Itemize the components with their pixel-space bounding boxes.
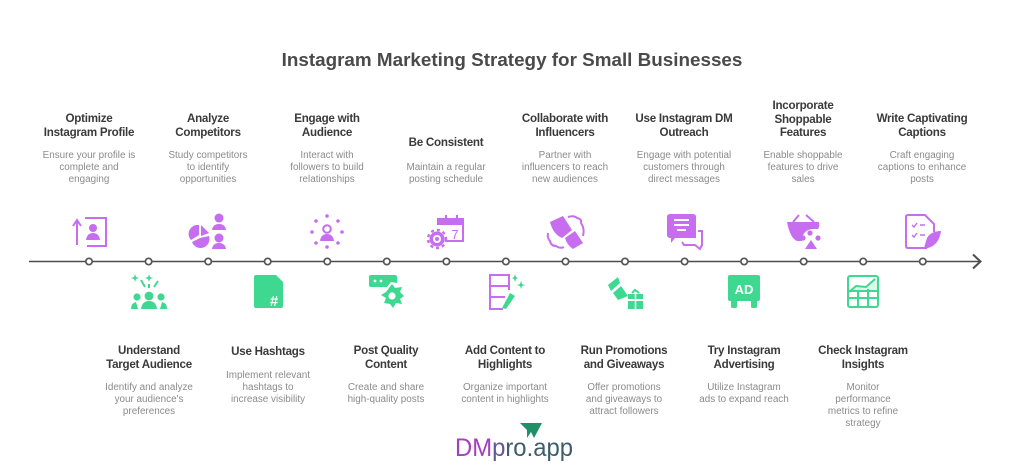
step: Add Content to Highlights: Organize important bbox=[463, 382, 547, 393]
step: Try Instagram Advertising: Utilize Instagram bbox=[707, 382, 781, 393]
step: Collaborate with Influencers: Collaborate with bbox=[522, 112, 608, 125]
step: Analyze Competitors: Competitors bbox=[175, 126, 241, 139]
step: Incorporate Shoppable Features bbox=[763, 99, 843, 185]
step: Optimize Instagram Profile bbox=[43, 112, 135, 185]
step: Optimize Instagram Profile: Optimize bbox=[66, 112, 113, 125]
step: Collaborate with Influencers: Partner with bbox=[539, 150, 591, 161]
step: Write Captivating Captions: captions to enhance bbox=[878, 162, 967, 173]
step: Use Hashtags: hashtags to bbox=[242, 382, 294, 393]
step: Check Instagram Insights: Check Instagram bbox=[818, 344, 908, 357]
step: Collaborate with Influencers bbox=[522, 112, 608, 185]
step: Use Instagram DM Outreach bbox=[635, 112, 733, 185]
step: Run Promotions and Giveaways: Offer promotions bbox=[587, 382, 661, 393]
icon: shopping basket bbox=[787, 215, 821, 249]
step: Write Captivating Captions bbox=[877, 112, 968, 185]
step: Add Content to Highlights: Highlights bbox=[478, 358, 532, 371]
step: Run Promotions and Giveaways: and giveaways to bbox=[586, 394, 663, 405]
step: Analyze Competitors: Study competitors bbox=[168, 150, 248, 161]
step: Analyze Competitors: to identify bbox=[187, 162, 229, 173]
step: Be Consistent: Maintain a regular bbox=[406, 162, 486, 173]
step: Use Hashtags: Implement relevant bbox=[226, 370, 310, 381]
step: Incorporate Shoppable Features: Enable shoppable bbox=[763, 150, 843, 161]
step: Use Instagram DM Outreach: customers through bbox=[643, 162, 725, 173]
step: Engage with Audience: Interact with bbox=[300, 150, 354, 161]
step: Optimize Instagram Profile: complete and bbox=[59, 162, 119, 173]
step: Run Promotions and Giveaways: attract followers bbox=[589, 406, 659, 417]
step: Incorporate Shoppable Features: Features bbox=[780, 126, 826, 139]
step: Analyze Competitors: Analyze bbox=[187, 112, 230, 125]
step: Run Promotions and Giveaways: Run Promotions bbox=[581, 344, 667, 357]
icon: profile upload bbox=[73, 218, 106, 246]
step: Try Instagram Advertising: Advertising bbox=[713, 358, 775, 371]
icon: AD board: AD bbox=[735, 282, 753, 297]
step: Post Quality Content bbox=[348, 344, 425, 405]
step: Optimize Instagram Profile: Instagram Profile bbox=[44, 126, 135, 139]
step: Try Instagram Advertising bbox=[699, 344, 789, 405]
step: Collaborate with Influencers: Influencers bbox=[535, 126, 595, 139]
step: Be Consistent bbox=[406, 136, 486, 185]
icon: audience bbox=[310, 214, 344, 249]
step: Write Captivating Captions: Write Captivating bbox=[877, 112, 968, 125]
icon: gift bbox=[608, 277, 643, 309]
step: Add Content to Highlights: content in highlights bbox=[461, 394, 549, 405]
step: Understand Target Audience: your audience's bbox=[115, 394, 183, 405]
step: Understand Target Audience: preferences bbox=[123, 406, 175, 417]
step: Write Captivating Captions: posts bbox=[910, 174, 934, 185]
step: Analyze Competitors bbox=[168, 112, 248, 185]
step: Check Instagram Insights: Insights bbox=[842, 358, 884, 371]
step: Be Consistent: Be Consistent bbox=[409, 136, 484, 149]
icon: competitors chart bbox=[189, 214, 226, 249]
step: Check Instagram Insights: Monitor bbox=[847, 382, 880, 393]
step: Understand Target Audience: Identify and analyze bbox=[105, 382, 193, 393]
step: Run Promotions and Giveaways bbox=[581, 344, 667, 417]
step: Engage with Audience: followers to build bbox=[290, 162, 364, 173]
step: Add Content to Highlights: Add Content to bbox=[465, 344, 545, 357]
step: Use Hashtags: Use Hashtags bbox=[231, 345, 305, 358]
step: Post Quality Content: Post Quality bbox=[354, 344, 419, 357]
step: Understand Target Audience: Understand bbox=[118, 344, 180, 357]
step: Check Instagram Insights: metrics to refine bbox=[828, 406, 899, 417]
step: Post Quality Content: Content bbox=[365, 358, 407, 371]
step: Analyze Competitors: opportunities bbox=[180, 174, 236, 185]
step: Incorporate Shoppable Features: Shoppable bbox=[774, 113, 832, 126]
step: Incorporate Shoppable Features: Incorporate bbox=[772, 99, 834, 112]
icon: target audience bbox=[131, 274, 167, 309]
icon: calendar and gear: 7 bbox=[451, 227, 459, 242]
step: Use Instagram DM Outreach: Use Instagram DM bbox=[635, 112, 733, 125]
step: Post Quality Content: high-quality posts bbox=[348, 394, 424, 405]
step: Write Captivating Captions: Craft engaging bbox=[890, 150, 954, 161]
icon: document and quill bbox=[906, 215, 941, 248]
step: Engage with Audience bbox=[290, 112, 364, 185]
icon: quality post bbox=[369, 275, 404, 308]
step: Be Consistent: posting schedule bbox=[409, 174, 484, 185]
timeline arrow bbox=[29, 254, 980, 268]
step: Add Content to Highlights bbox=[461, 344, 549, 405]
step: Run Promotions and Giveaways: and Giveaways bbox=[584, 358, 664, 371]
step: Check Instagram Insights: performance bbox=[835, 394, 891, 405]
step: Use Instagram DM Outreach: Outreach bbox=[660, 126, 709, 139]
step: Check Instagram Insights: strategy bbox=[845, 418, 881, 429]
step: Use Instagram DM Outreach: Engage with potential bbox=[637, 150, 731, 161]
icon: hashtag file bbox=[254, 275, 283, 310]
icon: insights chart bbox=[848, 276, 878, 307]
step: Use Hashtags bbox=[226, 345, 310, 405]
step: Post Quality Content: Create and share bbox=[348, 382, 425, 393]
step: Optimize Instagram Profile: Ensure your profile is bbox=[43, 150, 135, 161]
icon: AD board bbox=[728, 275, 760, 308]
step: Use Hashtags: increase visibility bbox=[231, 394, 305, 405]
step: Try Instagram Advertising: Try Instagram bbox=[708, 344, 780, 357]
step: Write Captivating Captions: Captions bbox=[898, 126, 946, 139]
logo: DMpro.app: DMpro.app bbox=[455, 434, 573, 462]
step: Optimize Instagram Profile: engaging bbox=[69, 174, 109, 185]
step: Collaborate with Influencers: new audiences bbox=[532, 174, 598, 185]
step: Incorporate Shoppable Features: features to drive bbox=[768, 162, 839, 173]
step: Check Instagram Insights bbox=[818, 344, 908, 429]
icon: DM chat bubbles bbox=[667, 214, 702, 249]
icon: highlights bbox=[490, 274, 525, 309]
step: Understand Target Audience bbox=[105, 344, 193, 417]
step: Collaborate with Influencers: influencers to reach bbox=[522, 162, 608, 173]
step: Try Instagram Advertising: ads to expand reach bbox=[699, 394, 789, 405]
step: Understand Target Audience: Target Audience bbox=[106, 358, 193, 371]
icon: handshake bbox=[548, 216, 584, 249]
step: Engage with Audience: Engage with bbox=[294, 112, 360, 125]
icon: hashtag file: # bbox=[270, 293, 279, 310]
step: Engage with Audience: relationships bbox=[299, 174, 355, 185]
step: Incorporate Shoppable Features: sales bbox=[791, 174, 815, 185]
icon: calendar and gear bbox=[428, 215, 464, 248]
step: Use Instagram DM Outreach: direct messages bbox=[648, 174, 720, 185]
step: Engage with Audience: Audience bbox=[302, 126, 353, 139]
title: Instagram Marketing Strategy for Small Businesses bbox=[282, 49, 742, 70]
